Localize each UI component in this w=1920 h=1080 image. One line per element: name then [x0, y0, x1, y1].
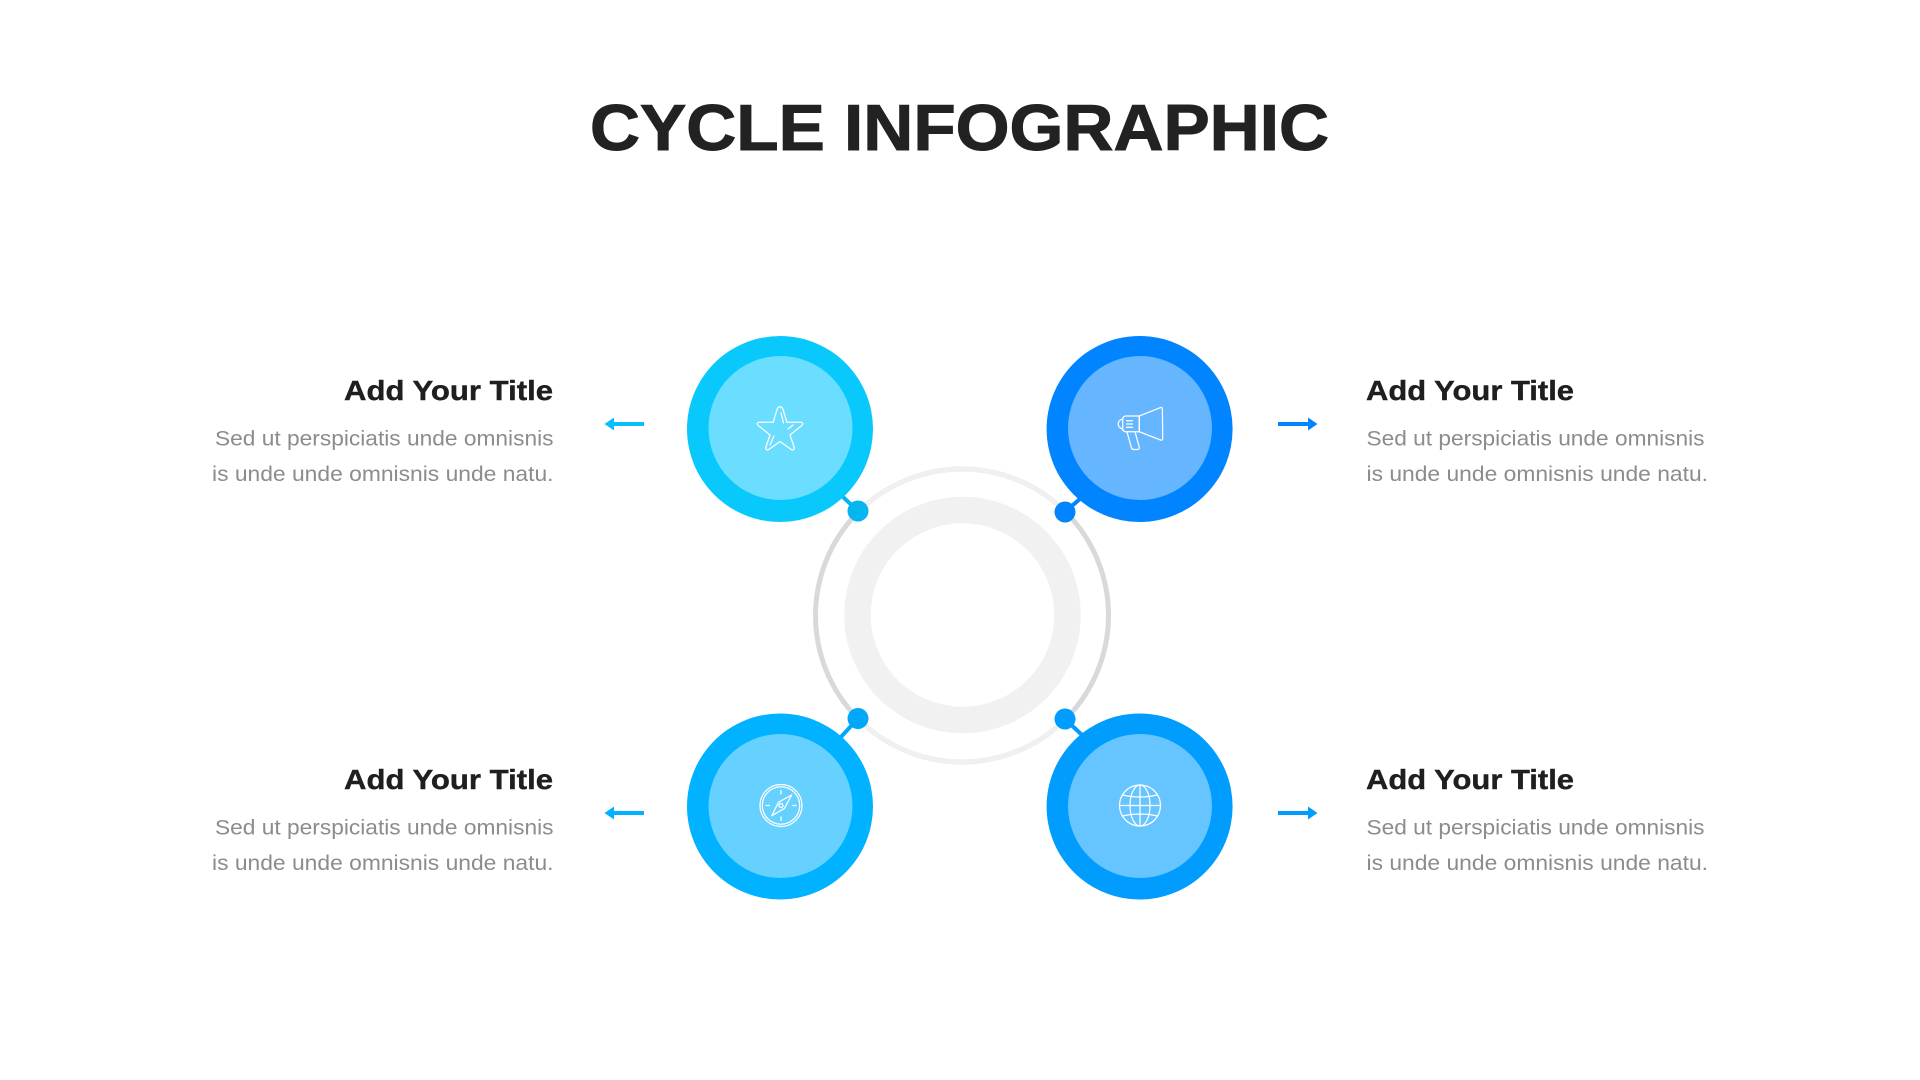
- icon: compass: [760, 784, 802, 826]
- text block: top-right: Add Your Title: [1366, 375, 1574, 406]
- connector: bottom-right: [1054, 708, 1082, 735]
- text block: top-left: Sed ut perspiciatis unde omnisnis: [215, 428, 554, 450]
- icon: star: [757, 407, 803, 450]
- circle: bottom-left: [687, 714, 873, 900]
- title: CYCLE INFOGRAPHIC: [590, 91, 1329, 164]
- panel: top-right node: [1047, 336, 1233, 522]
- text block: top-left: is unde unde omnisnis unde natu.: [212, 463, 554, 486]
- connector: top-right: [1054, 498, 1081, 522]
- text block: bottom-left: Add Your Title: [344, 764, 553, 795]
- text block: bottom-left: Sed ut perspiciatis unde omnisnis: [215, 816, 554, 840]
- connector: bottom-left: [840, 708, 868, 738]
- panel: bottom-right node: [1047, 708, 1233, 900]
- text block: top-left: Add Your Title: [344, 375, 553, 406]
- circle: top-right: [1047, 336, 1233, 522]
- icon: megaphone: [1118, 408, 1163, 450]
- text block: top-right: [1366, 375, 1708, 486]
- text block: bottom-left: [212, 764, 554, 875]
- circle: bottom-right: [1047, 714, 1233, 900]
- central cycle rings: [816, 469, 1108, 762]
- panel: top-left node: [687, 336, 873, 522]
- circle: top-left: [687, 336, 873, 522]
- arrow: bottom-right: [1278, 806, 1318, 820]
- arrow: top-left: [604, 418, 644, 430]
- text block: bottom-right: Add Your Title: [1366, 764, 1574, 795]
- text block: bottom-left: is unde unde omnisnis unde natu.: [212, 852, 554, 875]
- connector: top-left: [843, 497, 868, 522]
- text block: bottom-right: Sed ut perspiciatis unde omnisnis: [1366, 816, 1704, 840]
- arrow: top-right: [1278, 418, 1318, 430]
- text block: top-left: [212, 375, 554, 486]
- text block: top-right: is unde unde omnisnis unde natu.: [1366, 463, 1708, 486]
- text block: bottom-right: is unde unde omnisnis unde natu.: [1366, 852, 1708, 875]
- text block: bottom-right: [1366, 764, 1708, 875]
- icon: globe: [1120, 785, 1160, 826]
- panel: bottom-left node: [687, 708, 873, 900]
- text block: top-right: Sed ut perspiciatis unde omnisnis: [1366, 428, 1704, 450]
- arrow: bottom-left: [604, 806, 644, 820]
